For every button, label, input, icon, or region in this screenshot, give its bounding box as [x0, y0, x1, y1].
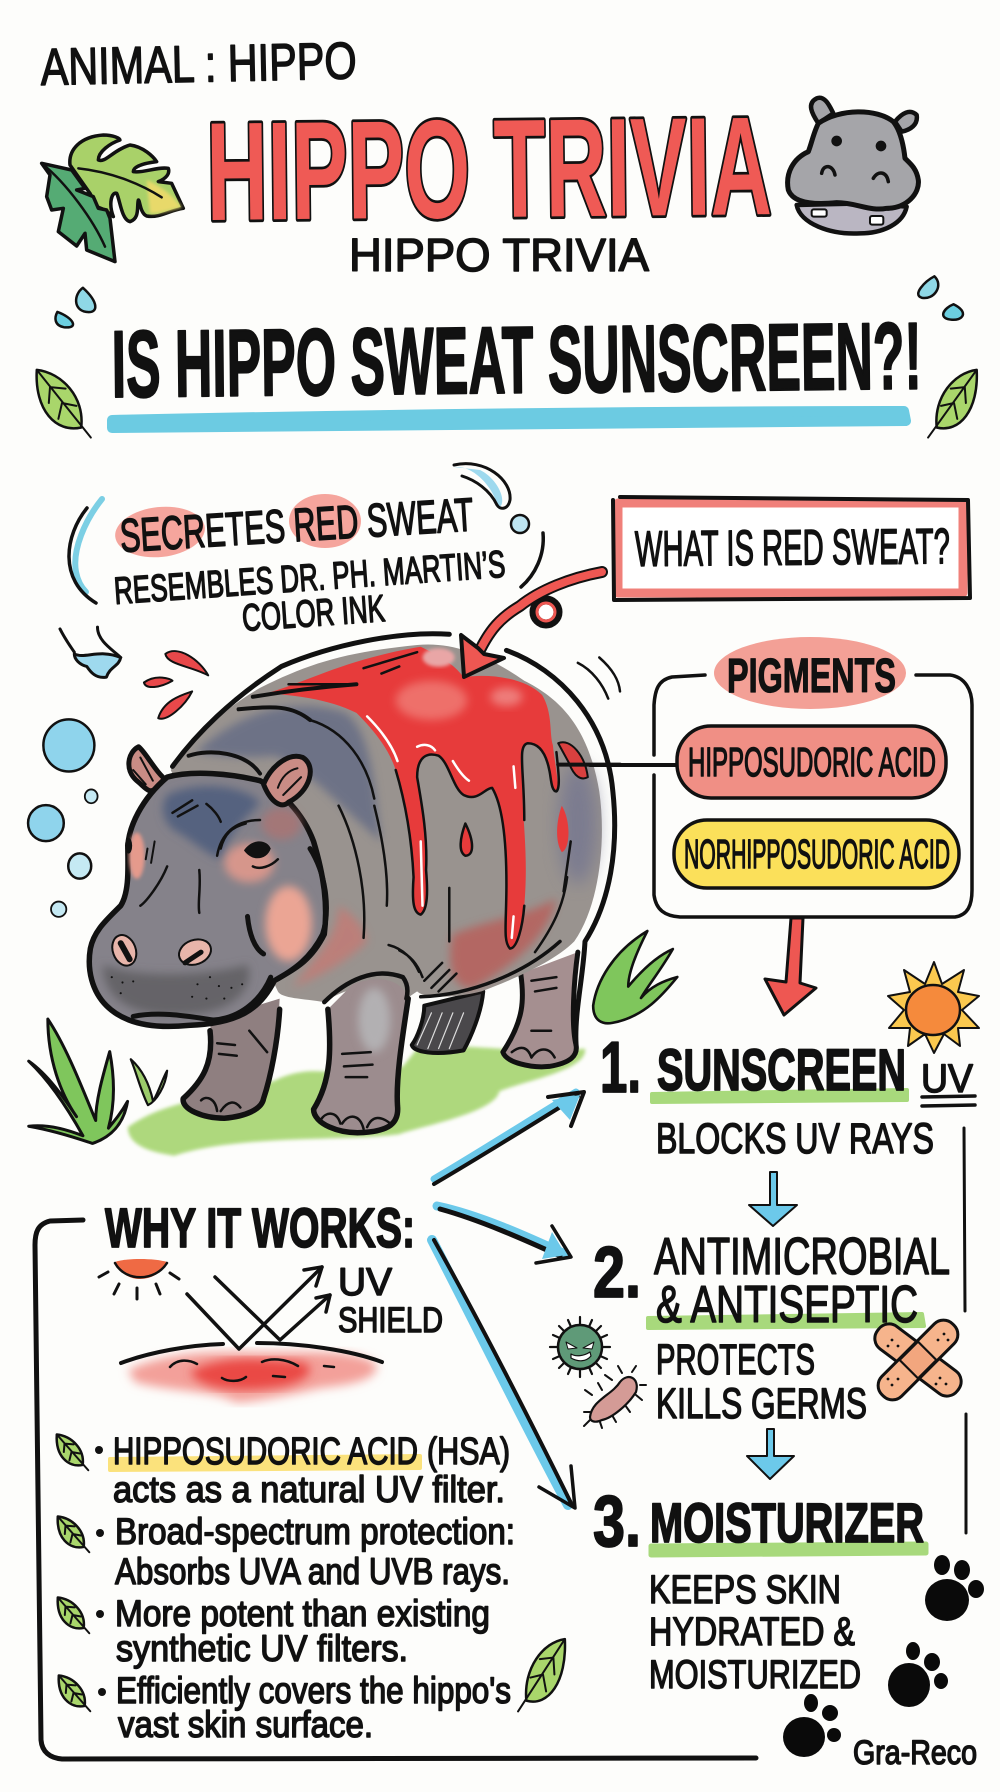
item 3: moisturizer [593, 1482, 926, 1697]
arrow: blue to antimicrobial [437, 1206, 571, 1263]
arrow: blue down 1 [749, 1172, 797, 1226]
panel: why it works: UV [338, 1261, 392, 1304]
item 1: sunscreen: UV [921, 1057, 973, 1101]
callout: red sweat note [69, 464, 543, 640]
callout: red sweat note: SECRETES RED SWEAT [118, 487, 475, 562]
bullet 1: (HSA) [427, 1431, 510, 1473]
panel: pigments [590, 637, 972, 917]
panel: why it works: SHIELD [338, 1301, 443, 1340]
heading: WHY IT WORKS: [105, 1196, 415, 1259]
bullet 4 [59, 1670, 511, 1745]
arrow: blue down 2 [747, 1429, 794, 1479]
bullet 3 [58, 1593, 490, 1669]
item 3: moisturizer: MOISTURIZED [649, 1653, 861, 1697]
callout: red sweat note: COLOR INK [241, 588, 386, 640]
icon: large leaf [518, 1639, 565, 1711]
item 3: moisturizer: HYDRATED & [649, 1610, 855, 1654]
blue underline [112, 411, 906, 428]
arrow: blue to moisturizer [432, 1240, 575, 1508]
bullet 2 [58, 1511, 515, 1592]
icon: bubbles [28, 719, 98, 917]
pill: hipposudoric acid [677, 726, 946, 798]
icon: germs [550, 1317, 646, 1428]
slate shoulder [196, 706, 381, 841]
splashes [165, 651, 208, 675]
subtitle: HIPPO TRIVIA [349, 229, 649, 281]
item 2: antimicrobial: 2. [593, 1233, 641, 1313]
body lines [310, 720, 571, 991]
pigments label: PIGMENTS [727, 650, 896, 703]
icon: paw prints [783, 1555, 984, 1757]
item 2: antimicrobial: PROTECTS [656, 1336, 815, 1384]
pill: norhipposudoric acid [674, 820, 959, 888]
far leg [412, 991, 483, 1053]
pigments label [714, 637, 906, 709]
box: what is red sweat [613, 497, 970, 600]
icon: grass [29, 931, 677, 1143]
left ear [129, 747, 167, 791]
illustration: hippo [60, 627, 620, 1156]
connector line stub over body [558, 763, 620, 767]
icon: left leaf [37, 370, 91, 438]
bullet 2: Absorbs UVA and UVB rays. [115, 1551, 510, 1592]
item 1: sunscreen [600, 1028, 975, 1163]
icon: bandages [870, 1315, 966, 1405]
head [89, 773, 326, 1026]
uv diagram [99, 1259, 382, 1402]
back contour [172, 634, 449, 766]
right divider [964, 1128, 966, 1533]
item 2: antimicrobial: KILLS GERMS [656, 1380, 867, 1428]
icon: right leaf [928, 370, 977, 438]
body [171, 644, 602, 1002]
item 3: moisturizer: 3. [593, 1482, 641, 1562]
bullet 2: Broad-spectrum protection: [115, 1511, 515, 1552]
ground wash [128, 1047, 585, 1156]
icon: hippo head [788, 98, 918, 233]
icon: tropical leaves [42, 135, 183, 262]
label: animal: ANIMAL : HIPPO [40, 32, 357, 97]
bullet 4: vast skin surface. [118, 1704, 373, 1745]
bullet 1 [57, 1431, 510, 1510]
belly pink [450, 899, 556, 988]
arrow: blue to sunscreen [434, 1092, 584, 1184]
icon: sun [888, 962, 979, 1053]
item 1: sunscreen: 1. [600, 1028, 641, 1108]
panel frame [35, 1220, 756, 1759]
pigments bracket [654, 675, 972, 917]
bullet 3: synthetic UV filters. [116, 1628, 408, 1669]
bullet 3: More potent than existing [115, 1593, 490, 1634]
right ear [264, 756, 310, 805]
arrow: red curved [461, 572, 602, 677]
near front leg [183, 999, 280, 1118]
red sweat [267, 647, 558, 949]
item 2: antimicrobial: & ANTISEPTIC [656, 1276, 918, 1334]
hind leg [503, 952, 578, 1067]
connector line [590, 763, 676, 767]
panel: why it works [35, 1196, 756, 1759]
center leg [314, 979, 408, 1133]
item 2: antimicrobial [593, 1228, 950, 1428]
credit: Gra-Reco [853, 1734, 977, 1772]
bullet 1: HIPPOSUDORIC ACID [113, 1431, 418, 1473]
bullet 4: Efficiently covers the hippo's [116, 1670, 511, 1711]
arrow: red down [765, 918, 816, 1015]
callout: red sweat note: RESEMBLES DR. PH. MARTIN’S [113, 544, 507, 613]
icon: water drops [55, 276, 963, 327]
item 3: moisturizer: KEEPS SKIN [649, 1568, 841, 1612]
bullet 1: acts as a natural UV filter. [113, 1469, 505, 1510]
